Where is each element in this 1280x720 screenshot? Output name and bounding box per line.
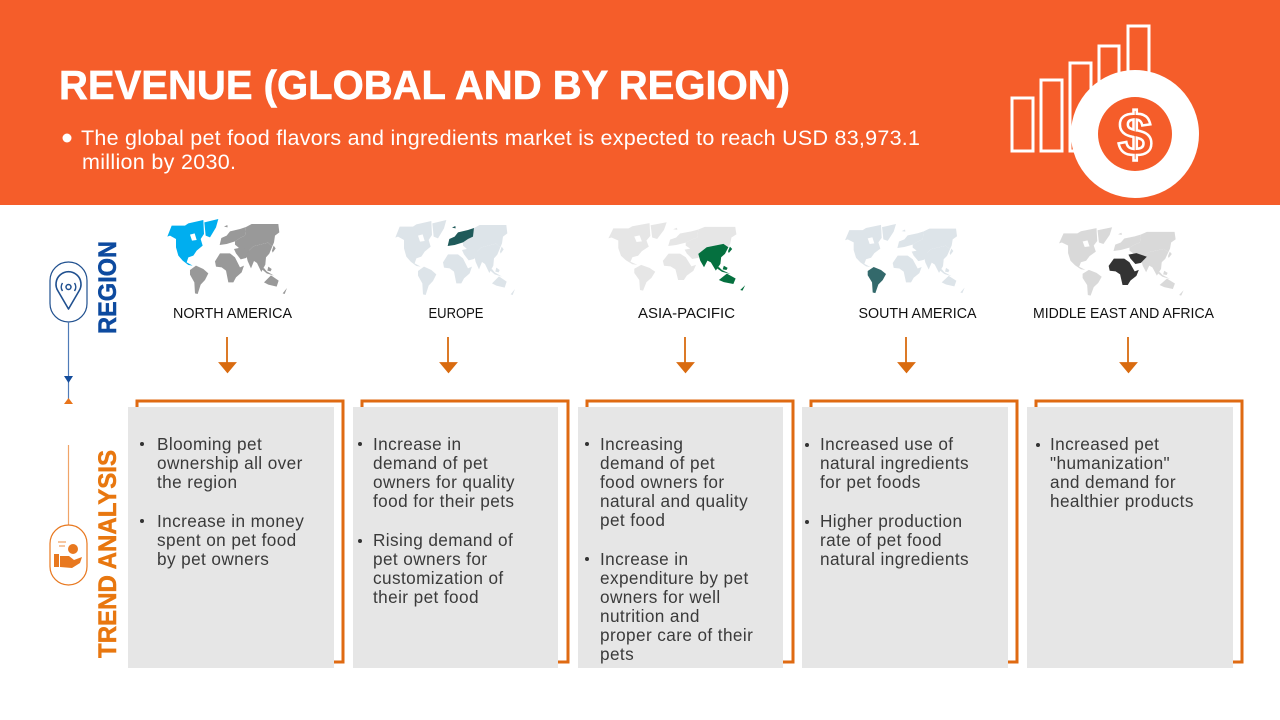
panel: south america trends: natural ingredients (820, 453, 969, 473)
header banner (0, 0, 1280, 205)
arrow: north america (220, 337, 235, 372)
panel: europe trends: demand of pet (373, 453, 488, 473)
icon: trend analysis hand with coin (50, 525, 87, 585)
panel: asia-pacific trends: nutrition and (600, 606, 700, 626)
panel: middle east and africa trends: "humanization" (1050, 453, 1170, 473)
summary text: The global pet food flavors and ingredients market is expected to reach USD 83,973.1 (81, 126, 920, 150)
panel: europe trends (353, 401, 568, 668)
panel: south america trends (802, 401, 1017, 668)
panel: north america trends: ownership all over (157, 453, 303, 473)
panel: south america trends: for pet foods (820, 472, 921, 492)
panel: north america trends: by pet owners (157, 549, 269, 569)
arrow: europe (441, 337, 456, 372)
summary text (62, 126, 920, 174)
panel: asia-pacific trends: pet food (600, 510, 665, 530)
panel: north america trends: Blooming pet (157, 434, 262, 454)
label: europe: EUROPE (428, 306, 484, 322)
column: europe map (395, 220, 515, 295)
panel: north america trends (128, 401, 343, 668)
panel: north america trends: Increase in money (157, 511, 304, 531)
arrow: asia-pacific (678, 337, 693, 372)
panel: asia-pacific trends: owners for well (600, 587, 721, 607)
panel: asia-pacific trends: Increasing (600, 434, 683, 454)
panel: europe trends: pet owners for (373, 549, 488, 569)
label: north america: NORTH AMERICA (173, 306, 292, 322)
panel: europe trends: Increase in (373, 434, 461, 454)
panel: europe trends: customization of (373, 568, 504, 588)
panel: middle east and africa trends: and demand for (1050, 472, 1176, 492)
panel: asia-pacific trends: expenditure by pet (600, 568, 749, 588)
column: asia-pacific map (608, 222, 745, 291)
column: middle east and africa map (1059, 227, 1184, 296)
title: REVENUE (GLOBAL AND BY REGION) (59, 62, 790, 108)
arrow: middle east and africa (1121, 337, 1136, 372)
heading: region: REGION (94, 241, 122, 334)
panel: asia-pacific trends: natural and quality (600, 491, 748, 511)
panel: asia-pacific trends (578, 401, 793, 668)
panel: middle east and africa trends: Increased pet (1050, 434, 1159, 454)
panel: asia-pacific trends: food owners for (600, 472, 724, 492)
summary text: million by 2030. (82, 150, 236, 174)
icon: revenue bars and dollar coin: $ (1118, 101, 1152, 170)
panel: middle east and africa trends (1027, 401, 1242, 668)
connector: region down arrow (64, 322, 73, 404)
panel: north america trends: spent on pet food (157, 530, 297, 550)
heading: trend analysis: TREND ANALYSIS (94, 450, 122, 658)
panel: middle east and africa trends: healthier products (1050, 491, 1194, 511)
column: north america map (167, 219, 287, 294)
panel: south america trends: natural ingredients (820, 549, 969, 569)
panel: europe trends: Rising demand of (373, 530, 513, 550)
label: asia-pacific: ASIA-PACIFIC (638, 306, 735, 322)
panel: north america trends: the region (157, 472, 237, 492)
panel: asia-pacific trends: proper care of their (600, 625, 753, 645)
connector: trend line (68, 445, 70, 525)
panel: asia-pacific trends: Increase in (600, 549, 688, 569)
arrow: south america (899, 337, 914, 372)
panel: europe trends: owners for quality (373, 472, 515, 492)
icon: region location pin (50, 262, 87, 322)
label: south america: SOUTH AMERICA (858, 306, 977, 322)
panel: south america trends: Higher production (820, 511, 962, 531)
column: south america map (845, 224, 965, 293)
panel: asia-pacific trends: demand of pet (600, 453, 715, 473)
icon: revenue bars and dollar coin (1012, 26, 1199, 198)
panel: europe trends: their pet food (373, 587, 479, 607)
panel: south america trends: Increased use of (820, 434, 953, 454)
panel: europe trends: food for their pets (373, 491, 514, 511)
panel: south america trends: rate of pet food (820, 530, 942, 550)
panel: asia-pacific trends: pets (600, 644, 634, 664)
label: middle east and africa: MIDDLE EAST AND AFRICA (1033, 306, 1214, 322)
